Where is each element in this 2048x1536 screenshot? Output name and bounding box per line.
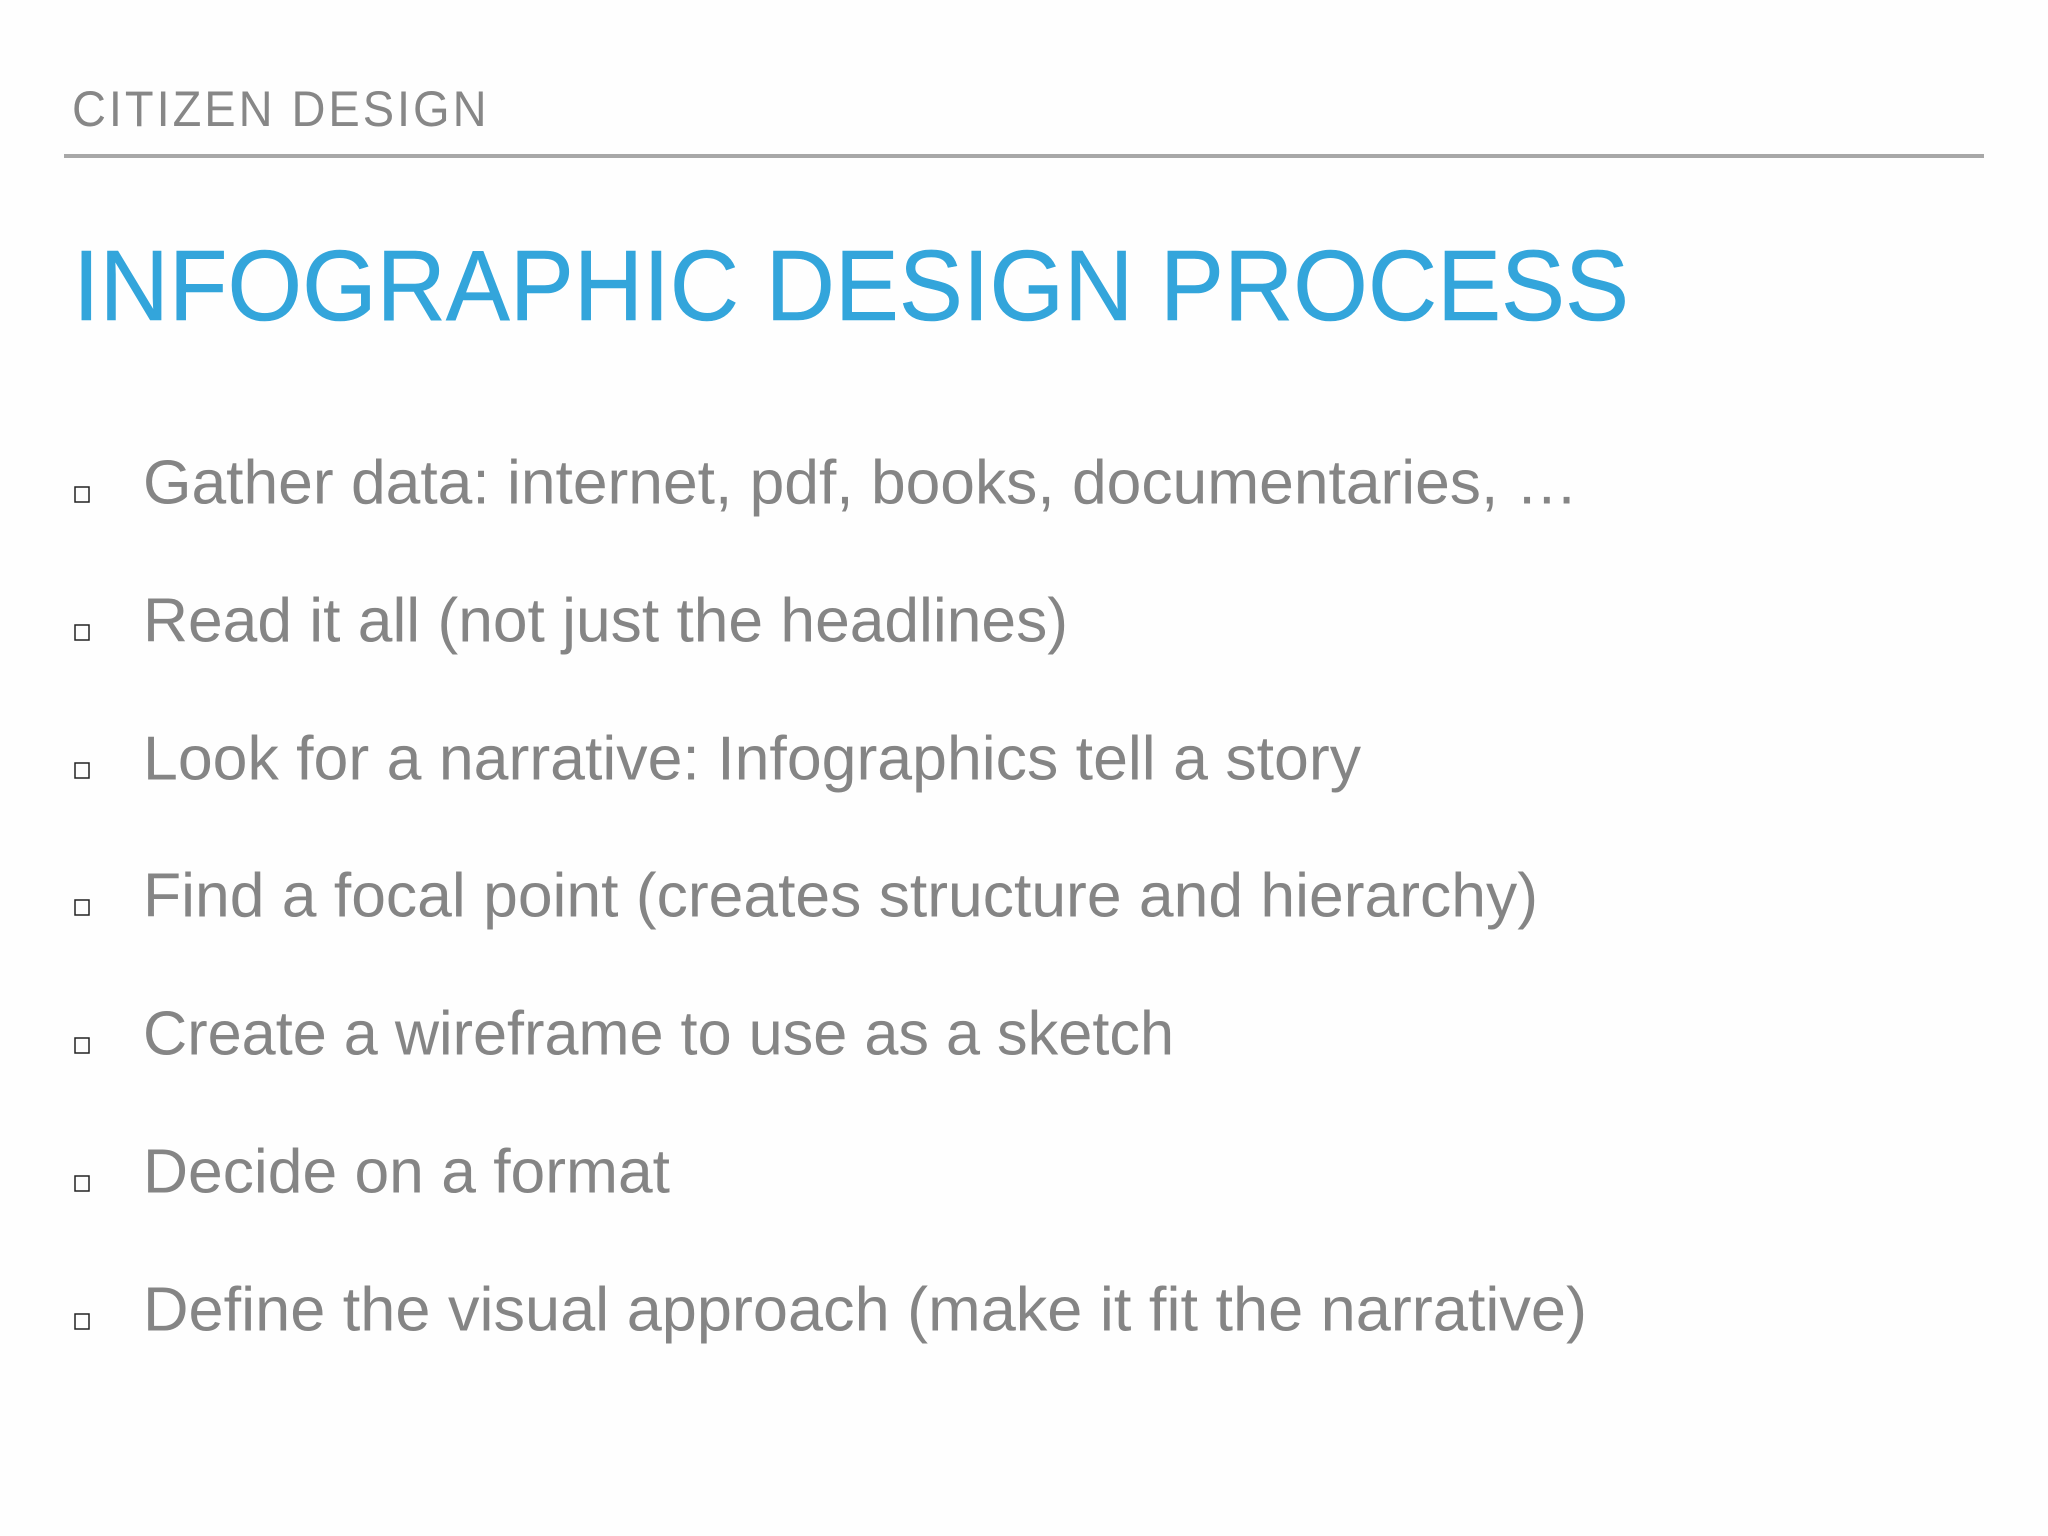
header label: CITIZEN DESIGN: [72, 82, 487, 137]
list item 5: Create a wireframe to use as a sketch: [143, 1000, 1174, 1068]
bullet list: [75, 448, 1587, 1344]
list item 7: Define the visual approach (make it fit the narrative): [143, 1276, 1587, 1344]
list item 6: Decide on a format: [143, 1138, 670, 1206]
list item 2: Read it all (not just the headlines): [143, 586, 1068, 656]
header rule: [64, 154, 1984, 158]
list item 1: Gather data: internet, pdf, books, documentaries, …: [143, 448, 1578, 518]
list item 3: Look for a narrative: Infographics tell a story: [143, 724, 1361, 794]
title: INFOGRAPHIC DESIGN PROCESS: [73, 230, 1629, 342]
list item 4: Find a focal point (creates structure and hierarchy): [143, 862, 1538, 930]
